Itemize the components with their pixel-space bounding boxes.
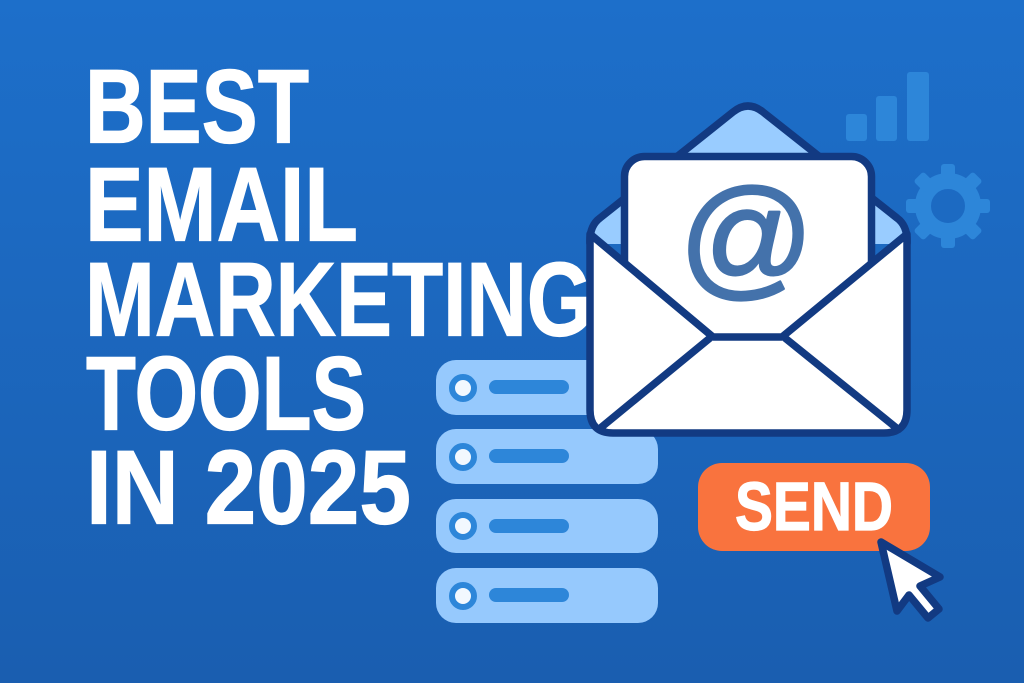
icon: open envelope <box>590 106 907 433</box>
at sign: @ <box>679 163 814 311</box>
email list <box>436 360 658 623</box>
title line: MARKETING: MARKETING <box>85 242 592 358</box>
list row 4 <box>436 568 658 623</box>
letter card <box>624 156 872 376</box>
title line: TOOLS: TOOLS <box>86 336 366 452</box>
envelope front <box>590 234 907 433</box>
icon: bar chart <box>846 72 929 141</box>
envelope lower fold left <box>598 338 710 430</box>
title line: EMAIL: EMAIL <box>85 146 358 264</box>
list row 3 <box>436 499 658 553</box>
envelope back flap <box>590 106 907 244</box>
button label: SEND <box>735 468 893 545</box>
list row 2 <box>436 429 658 484</box>
envelope lower fold right <box>785 338 899 430</box>
title <box>85 48 592 546</box>
title line: IN 2025: IN 2025 <box>86 430 411 546</box>
send button <box>698 463 930 551</box>
list row 1 <box>436 360 658 415</box>
icon: gear <box>906 164 990 248</box>
icon: mouse cursor <box>881 542 940 618</box>
title line: BEST: BEST <box>85 48 309 166</box>
